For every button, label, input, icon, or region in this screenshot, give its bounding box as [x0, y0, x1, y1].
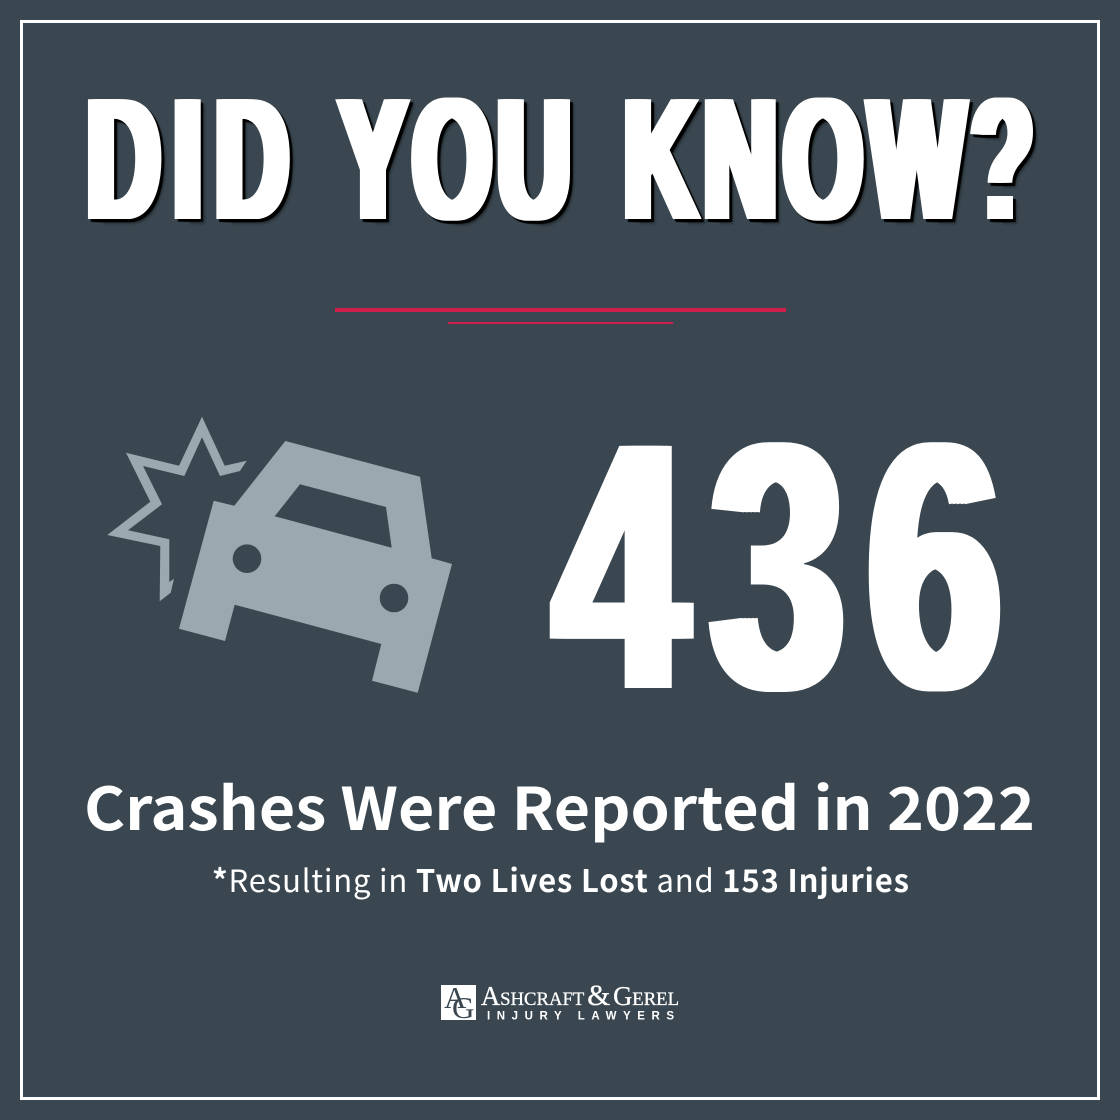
logo mark: AG monogram: [441, 980, 476, 1025]
title: [87, 61, 1040, 256]
title: YOU: [339, 61, 577, 256]
big number 436: 436: [554, 369, 1025, 763]
title: DID: [87, 61, 302, 256]
red divider lines: [335, 308, 786, 324]
icon: impact star: [107, 417, 247, 601]
logo name: ASHCRAFT&GEREL: [481, 979, 679, 1012]
footnote: *Resulting in Two Lives Lost and 153 Injuries: [212, 856, 909, 901]
subheading: Crashes Were Reported in 2022: [84, 762, 1035, 847]
title: KNOW?: [624, 61, 1040, 256]
logo mark: AG monogram: G: [452, 990, 474, 1025]
logo mark: AG monogram: A: [444, 980, 467, 1015]
icon: car: [179, 441, 452, 693]
icon: crashed car with impact star: [107, 417, 452, 693]
logo: Ashcraft & Gerel: [441, 979, 679, 1025]
logo tagline: INJURY LAWYERS: [487, 1010, 674, 1022]
